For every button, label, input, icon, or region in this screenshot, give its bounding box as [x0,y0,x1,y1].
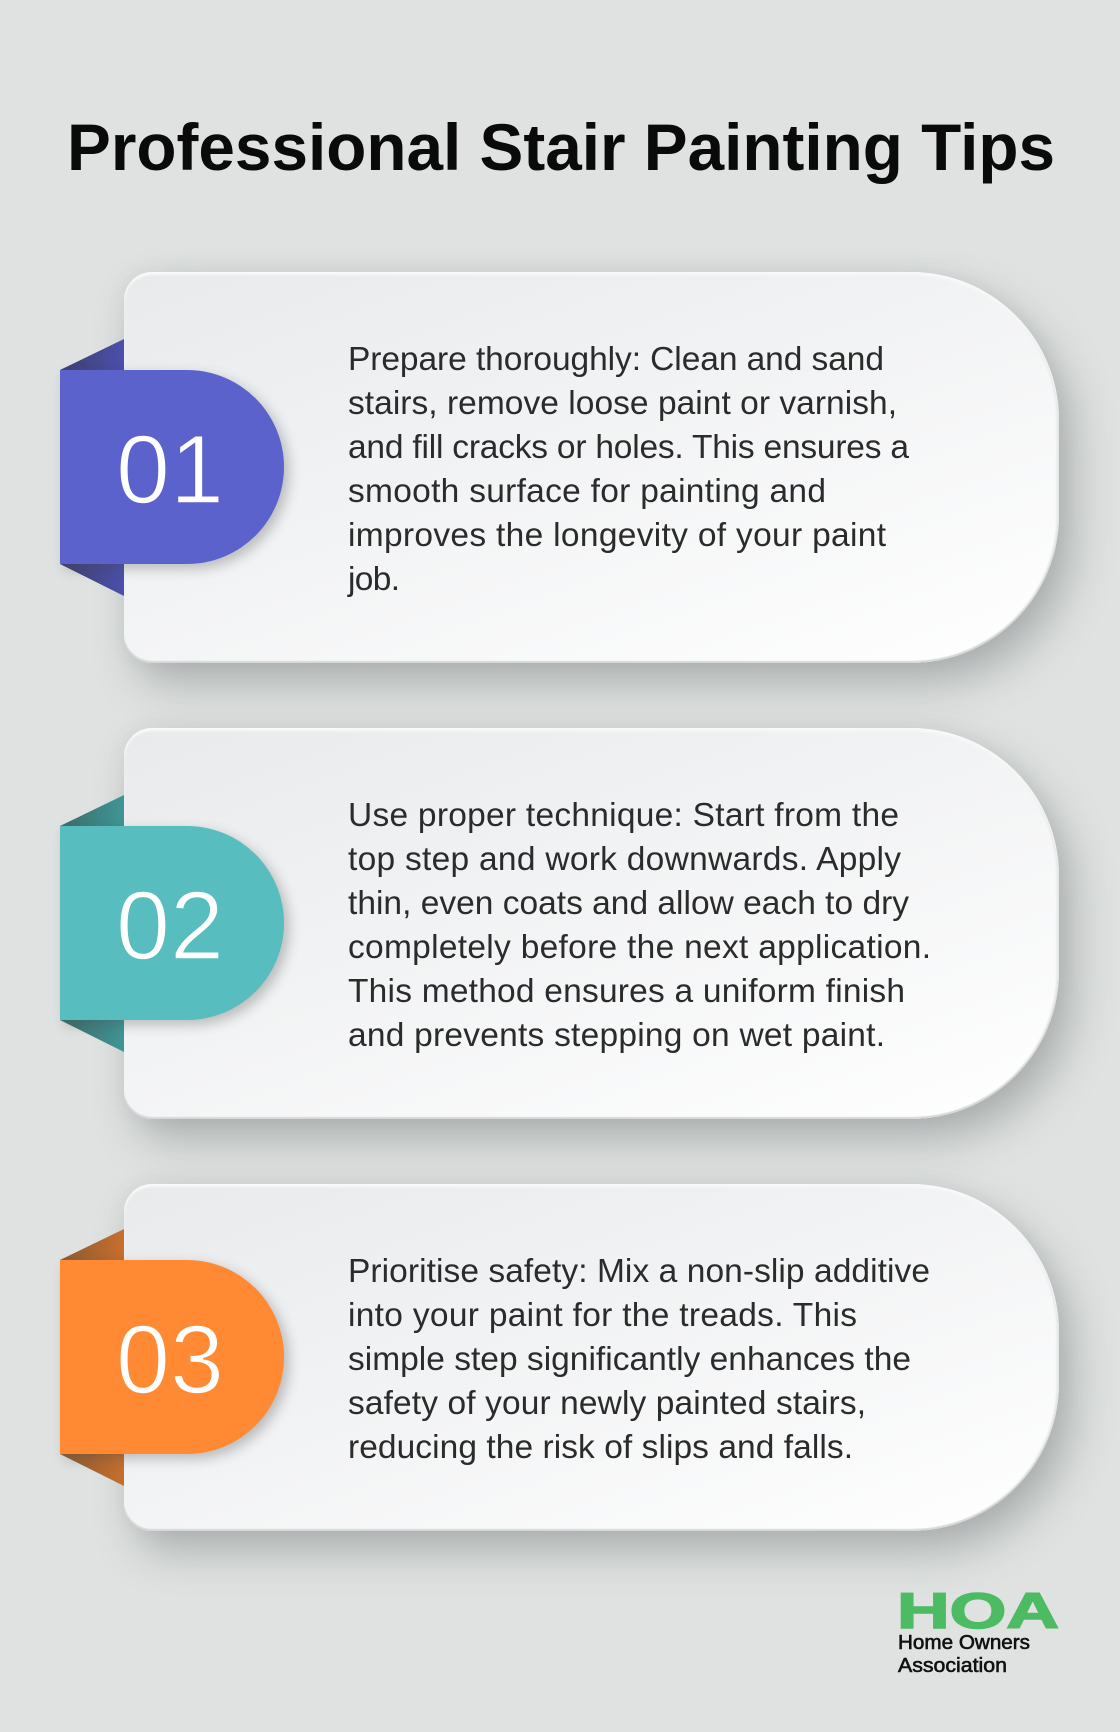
ribbon folds 02 [60,795,124,1052]
text: prioritise safety: safety of your newly painted stairs, [348,1385,866,1422]
text: prepare thoroughly [347,341,909,598]
text: prioritise safety: into your paint for the treads. This [348,1297,857,1334]
text: proper technique: thin, even coats and allow each to dry [348,885,909,922]
logo: HOA Home Owners Association: HOA [897,1583,1059,1639]
text: proper technique: This method ensures a uniform finish [348,973,905,1010]
badge 02 [60,826,284,1020]
text: prepare thoroughly: job. [347,561,400,598]
text: prepare thoroughly: Prepare thoroughly: Clean and sand [348,341,884,378]
text: proper technique: top step and work downwards. Apply [348,841,901,878]
text: prioritise safety: simple step significantly enhances the [348,1341,911,1378]
panel: step 01 [59,266,1095,705]
card background 02 [124,728,1059,1119]
logo: HOA Home Owners Association: Home Owners [898,1632,1030,1654]
text: prepare thoroughly: and fill cracks or holes. This ensures a [348,429,909,466]
card background 03 [124,1184,1059,1531]
badge 03 [60,1260,284,1454]
text: proper technique: and prevents stepping on wet paint. [348,1017,885,1054]
badge 01 [60,370,284,564]
badge 01: 01 [116,415,224,524]
text: proper technique: completely before the next application. [348,929,931,966]
title: Professional Stair Painting Tips [67,110,1055,184]
logo: HOA Home Owners Association: Association [898,1655,1007,1677]
text: prepare thoroughly: smooth surface for painting and [348,473,826,510]
ribbon folds 01 [60,339,124,596]
card background 01 [124,272,1059,663]
text: prioritise safety [348,1253,930,1466]
text: prepare thoroughly: stairs, remove loose paint or varnish, [348,385,897,422]
panel: step 02 [59,722,1095,1161]
text: proper technique [348,797,931,1054]
text: prioritise safety: reducing the risk of slips and falls. [348,1429,853,1466]
badge 02: 02 [116,871,224,980]
badge 03: 03 [116,1305,224,1414]
text: proper technique: Use proper technique: Start from the [348,797,899,834]
panel: step 03 [59,1178,1095,1573]
ribbon folds 03 [60,1229,124,1486]
text: prepare thoroughly: improves the longevity of your paint [348,517,887,554]
text: prioritise safety: Prioritise safety: Mix a non-slip additive [348,1253,930,1290]
